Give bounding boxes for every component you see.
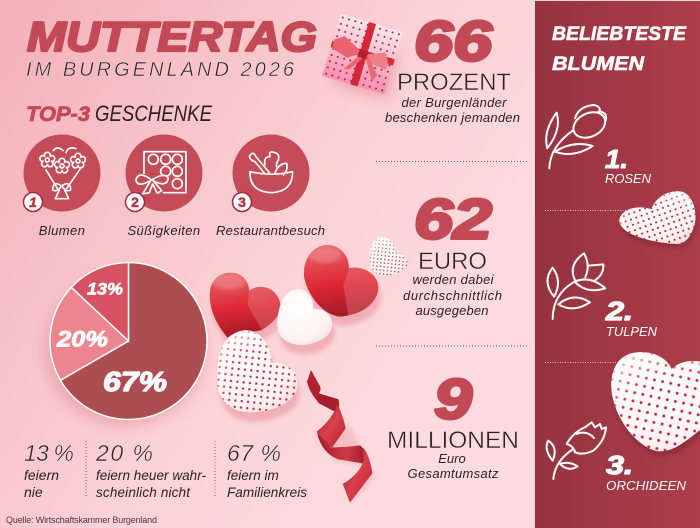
icon: flower 3 <box>547 422 606 479</box>
flower 2: tulpen: 2. <box>605 296 633 326</box>
stat: 62 euro: 62 <box>414 188 492 252</box>
icon: flower 1 <box>546 105 609 168</box>
slice 13 percent <box>71 262 128 341</box>
heading: top-3 geschenke: TOP-3 <box>26 103 90 126</box>
subtitle: IM BURGENLAND 2026 <box>26 59 295 81</box>
text: 67 percent <box>227 440 307 500</box>
text: 13 percent: feiern <box>24 467 59 483</box>
text: 67 percent: 67 % <box>227 440 281 466</box>
pie chart <box>45 262 207 426</box>
flower 3: orchideen: 3. <box>606 450 633 480</box>
stat: 9 millionen <box>387 368 519 481</box>
stat: 9 millionen: Euro <box>438 451 466 466</box>
title <box>26 13 317 81</box>
text: 67 percent: Familienkreis <box>227 485 307 500</box>
heading: beliebteste blumen: BLUMEN <box>552 54 645 75</box>
text: 20 percent <box>95 440 206 500</box>
text: 20 percent: feiern heuer wahr- <box>96 468 206 483</box>
heart: red left <box>210 273 280 338</box>
label 20: 20% <box>56 326 108 352</box>
decorative hearts <box>210 236 409 422</box>
badge 3: 3 <box>238 194 246 210</box>
text: 13 percent <box>24 440 74 500</box>
source: Quelle: Wirtschaftskammer Burgenland <box>6 515 157 525</box>
stat: 66 prozent <box>385 10 520 125</box>
heart: panel lower <box>608 349 700 457</box>
flower 1: rosen <box>546 105 652 186</box>
text: 67 percent: feiern im <box>227 468 279 483</box>
icon: ribbon <box>307 370 375 505</box>
label 67: 67% <box>103 366 167 397</box>
heart: white <box>277 289 332 345</box>
icon: suessigkeiten circle <box>126 134 202 212</box>
gift labels: Süßigkeiten <box>127 223 201 238</box>
panel: beliebteste blumen background <box>535 1 700 528</box>
stat: 66 prozent: PROZENT <box>397 69 511 96</box>
slice 67 percent <box>60 262 207 420</box>
stat: 9 millionen: 9 <box>434 368 472 432</box>
icon: blumen circle <box>24 134 100 212</box>
stat: 66 prozent: 66 <box>414 10 492 74</box>
text: 13 percent: 13 % <box>24 440 74 466</box>
heading: beliebteste blumen <box>552 24 687 75</box>
gift labels <box>39 223 325 238</box>
icon: gift box <box>322 14 403 100</box>
slice 20 percent <box>50 287 128 380</box>
stat: 66 prozent: beschenken jemanden <box>385 110 520 125</box>
icon: restaurantbesuch circle <box>232 134 310 212</box>
flower 1: rosen: 1. <box>605 144 628 174</box>
stat: 66 prozent: der Burgenländer <box>402 95 507 110</box>
flower 2: tulpen: TULPEN <box>606 325 658 339</box>
flower 2: tulpen <box>547 253 658 339</box>
icon: flower 2 <box>547 253 605 319</box>
text: 13 percent: nie <box>24 484 43 500</box>
heart shadows <box>212 254 381 422</box>
stat: 9 millionen: Gesamtumsatz <box>408 466 499 481</box>
label 13: 13% <box>87 280 123 298</box>
flower 3: orchideen <box>547 422 687 493</box>
title: MUTTERTAG <box>27 13 317 60</box>
gift labels: Restaurantbesuch <box>216 223 325 238</box>
heart: panel upper <box>617 188 698 249</box>
gift labels: Blumen <box>39 223 85 238</box>
heading: beliebteste blumen: BELIEBTESTE <box>552 24 687 45</box>
stat: 9 millionen: MILLIONEN <box>387 427 519 454</box>
flower 3: orchideen: ORCHIDEEN <box>606 479 687 493</box>
flower 1: rosen: ROSEN <box>605 172 652 186</box>
heart: dotted large <box>215 328 300 415</box>
heading: top-3 geschenke <box>26 101 212 126</box>
stat: 62 euro: durchschnittlich <box>403 288 502 303</box>
heading: top-3 geschenke: GESCHENKE <box>95 101 212 126</box>
stat: 62 euro <box>403 188 502 318</box>
stat: 62 euro: ausgegeben <box>416 303 488 318</box>
badge 2: 2 <box>131 194 139 210</box>
text: 20 percent: 20 % <box>95 440 153 466</box>
text: 20 percent: scheinlich nicht <box>96 485 191 500</box>
heart: dotted small <box>369 237 408 276</box>
stat: 62 euro: werden dabei <box>412 272 495 287</box>
stat: 62 euro: EURO <box>418 248 487 275</box>
heart: red right <box>304 245 378 317</box>
badge 1: 1 <box>29 194 37 210</box>
